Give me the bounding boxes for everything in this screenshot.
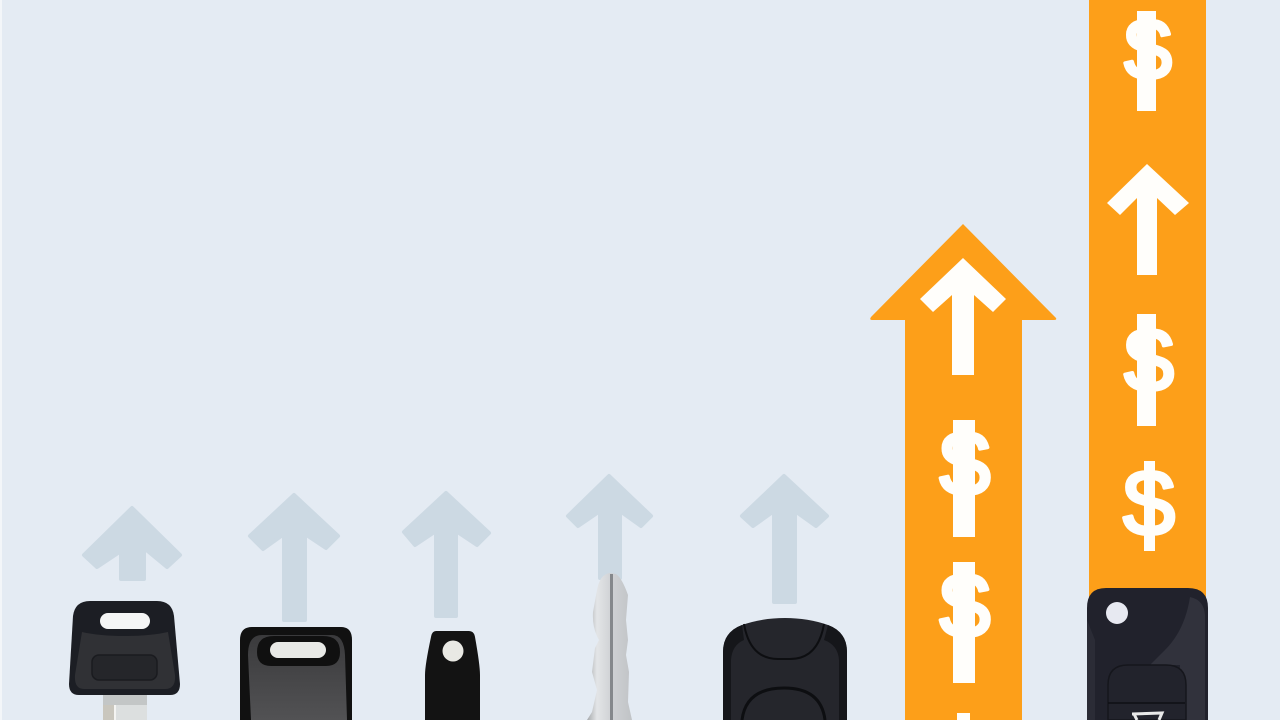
- icon: dollar sign top: $: [1124, 2, 1172, 98]
- key 3: slim black fob: [425, 631, 480, 720]
- orange column: highest cost: [1089, 0, 1206, 610]
- orange bar: [1089, 0, 1206, 610]
- arrow: faded arrow above key 2: [250, 495, 338, 620]
- arrow: faded arrow above key 5: [742, 476, 827, 602]
- key 4: metal key blade: [587, 573, 632, 720]
- arrow: faded arrow above key 4: [568, 476, 651, 578]
- arrow: faded arrow above key 1: [84, 508, 180, 579]
- key 2: wide dark head: [240, 627, 352, 720]
- icon: dollar sign 2: $: [939, 555, 991, 657]
- icon: white up arrow: [1107, 164, 1189, 275]
- icon: dollar sign middle: $: [1124, 311, 1174, 411]
- icon: dollar sign 1: $: [939, 413, 991, 515]
- icon: white up arrow: [920, 258, 1006, 375]
- icon: dollar sign lower: $: [1123, 450, 1175, 555]
- key 5: black remote fob: [723, 618, 847, 720]
- orange arrow shape: [870, 224, 1056, 720]
- icon: dollar stem cut off at bottom: [957, 713, 970, 720]
- key 6: flip key remote: [1087, 588, 1208, 720]
- arrow: faded arrow above key 3: [404, 493, 489, 616]
- orange arrow column: medium cost: [870, 224, 1056, 720]
- key 1: black head with metal blade: [69, 601, 180, 720]
